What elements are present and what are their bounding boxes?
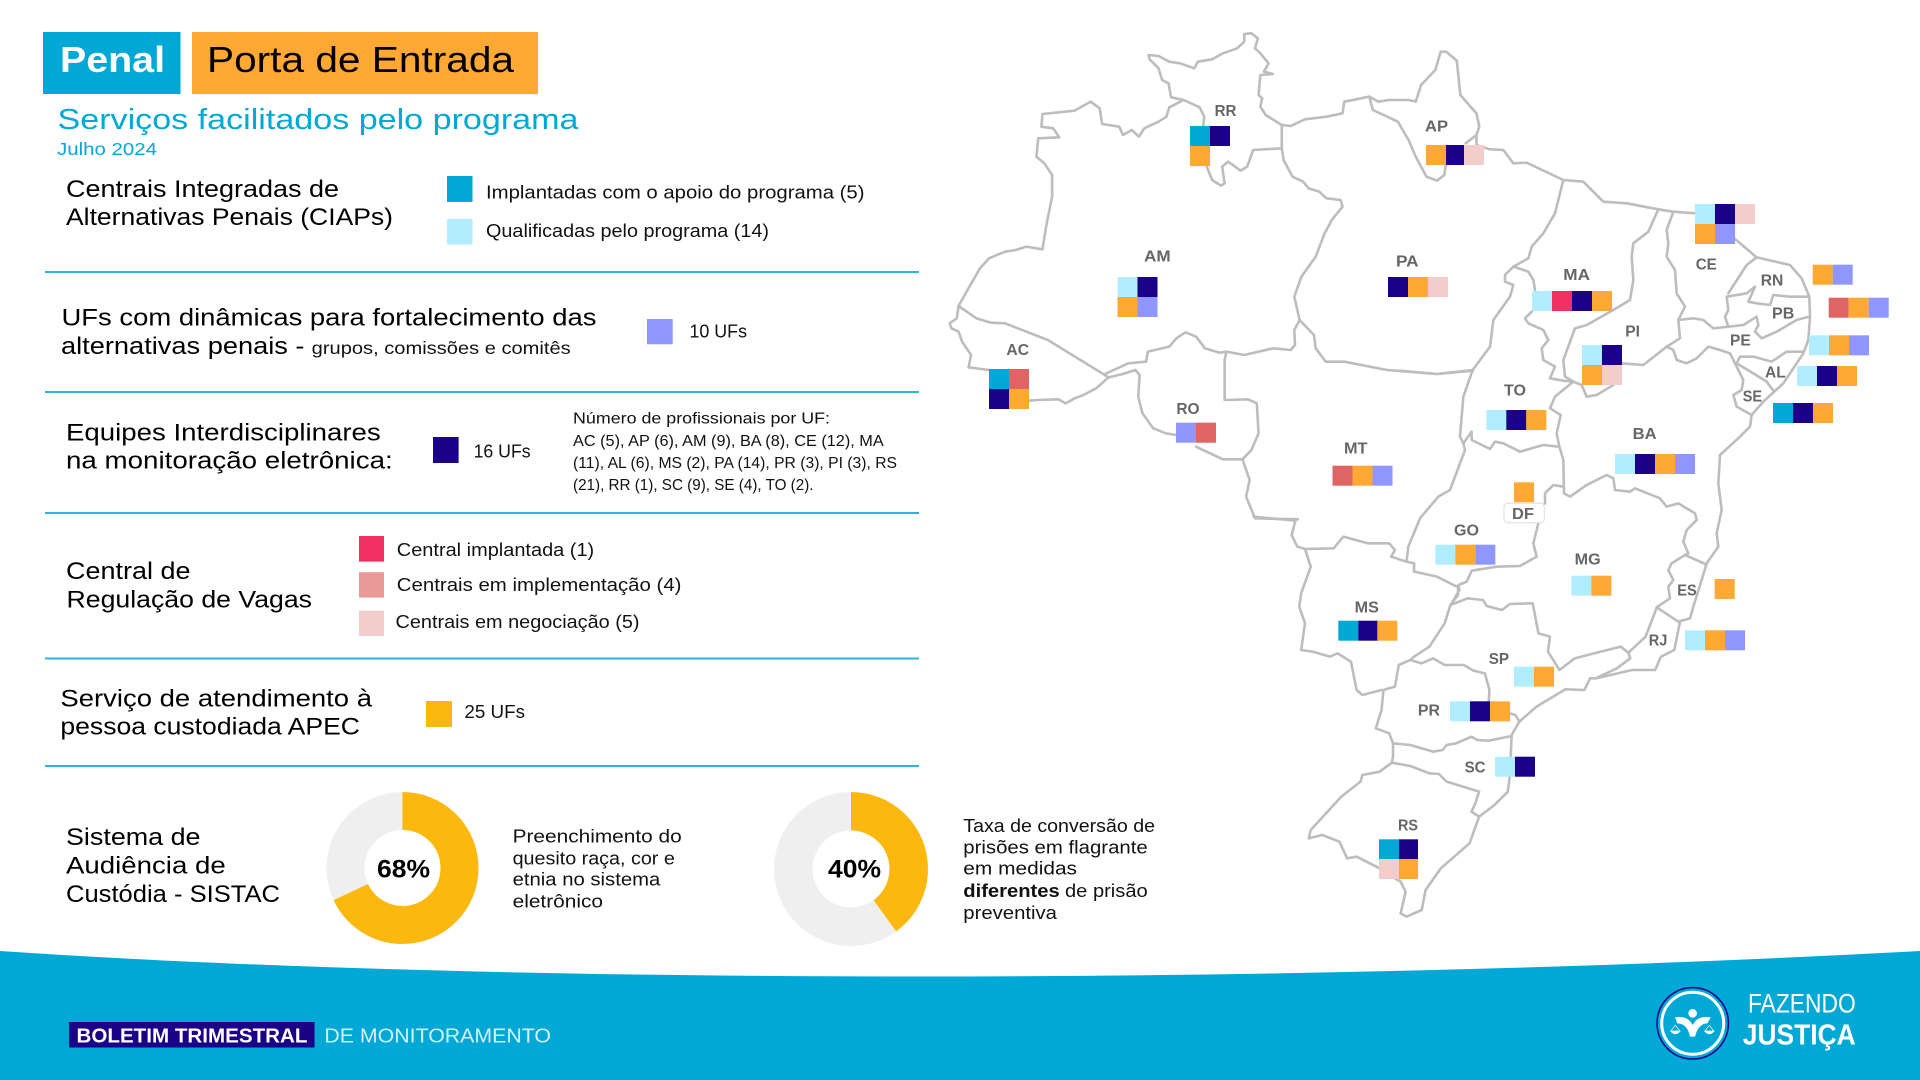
state: SP: SP	[1489, 651, 1509, 668]
state: RS: RS	[1398, 818, 1418, 835]
date: Julho 2024	[57, 139, 157, 159]
state: GO: GO	[1454, 523, 1479, 540]
heading: CIAPs: Centrais Integradas de	[66, 176, 339, 203]
heading: CIAPs	[66, 176, 393, 231]
heading: dinâmicas: UFs com dinâmicas para fortalecimento das	[62, 305, 596, 332]
state: RN: RN	[1761, 273, 1783, 290]
state: RS	[1379, 818, 1418, 879]
panel: APEC	[60, 685, 525, 741]
panel: CIAPs	[66, 176, 864, 244]
state: AP: AP	[1425, 119, 1448, 136]
state: ES	[1677, 579, 1735, 599]
text: profissionais por UF: (21), RR (1), SC (9), SE (4), TO (2).	[573, 477, 814, 494]
legend: 16 UFs: 16 UFs	[474, 442, 531, 462]
state: AM	[1118, 249, 1171, 317]
logo: Fazendo Justiça: JUSTIÇA	[1743, 1019, 1856, 1051]
state: TO	[1486, 383, 1546, 430]
state: PA	[1388, 254, 1448, 297]
footer label: BOLETIM TRIMESTRAL	[76, 1026, 308, 1048]
state: ES: ES	[1677, 582, 1697, 599]
heading: dinâmicas	[61, 305, 596, 360]
footer label	[69, 1022, 551, 1048]
map of Brazil	[950, 33, 1889, 917]
tag: Penal	[43, 32, 180, 94]
state: AC	[989, 342, 1029, 409]
heading: dinâmicas: alternativas penais -	[61, 333, 304, 360]
text: profissionais por UF: (11), AL (6), MS (2), PA (14), PR (3), PI (3), RS	[573, 455, 897, 472]
footer label: DE MONITORAMENTO	[324, 1026, 551, 1048]
state: MS: MS	[1355, 599, 1379, 616]
heading: regulação: Regulação de Vagas	[66, 586, 312, 614]
state: AC: AC	[1006, 342, 1029, 359]
state: CE: CE	[1696, 256, 1717, 273]
text: taxa de conversão	[963, 816, 1155, 923]
donut chart: 40%	[793, 811, 909, 927]
heading: SISTAC: Audiência de	[66, 853, 226, 880]
legend: em negociação	[359, 611, 640, 636]
state: AP	[1425, 119, 1484, 165]
state: MG	[1571, 551, 1611, 596]
legend: 16 UFs	[433, 437, 531, 463]
state: MA	[1532, 267, 1612, 311]
legend: central implantada: Central implantada (1)	[397, 540, 594, 560]
state: TO: TO	[1504, 383, 1526, 400]
state: MG: MG	[1575, 551, 1601, 568]
text: taxa de conversão: de prisão	[1065, 881, 1148, 901]
heading: equipes: na monitoração eletrônica:	[66, 448, 393, 475]
state: RO: RO	[1176, 401, 1200, 418]
tag: Penal: Penal	[60, 39, 165, 80]
text: taxa de conversão: em medidas	[963, 859, 1077, 879]
heading: APEC: Serviço de atendimento à	[60, 685, 372, 712]
tag: Porta de Entrada: Porta de Entrada	[207, 39, 515, 80]
legend: em negociação: Centrais em negociação (5)	[396, 612, 640, 632]
heading: APEC: pessoa custodiada APEC	[60, 714, 360, 741]
state: DF: DF	[1512, 506, 1534, 523]
donut chart: 40%: 40%	[828, 856, 881, 884]
state: RO	[1176, 401, 1216, 443]
map outlines	[950, 33, 1810, 917]
state: CE	[1695, 204, 1755, 273]
heading: SISTAC: Sistema de	[66, 824, 200, 851]
donut chart: 68%	[346, 811, 460, 925]
legend: 25 UFs: 25 UFs	[464, 702, 525, 722]
legend: 10 UFs: 10 UFs	[690, 322, 747, 342]
state: GO	[1435, 523, 1495, 565]
legend: central implantada	[359, 536, 594, 562]
state: AM: AM	[1144, 249, 1171, 266]
state: PB	[1772, 298, 1889, 322]
legend: implantadas	[447, 176, 864, 203]
state: RN	[1761, 265, 1853, 290]
text: preenchimento: quesito raça, cor e	[513, 848, 675, 868]
state: DF	[1504, 482, 1544, 523]
panel: UFs com dinâmicas	[61, 305, 747, 360]
state: MS	[1338, 599, 1397, 641]
state: RJ	[1649, 630, 1745, 650]
heading: equipes: Equipes Interdisciplinares	[66, 420, 381, 447]
title: Serviços facilitados pelo programa	[58, 104, 580, 136]
heading: APEC	[60, 685, 372, 741]
text: profissionais por UF	[573, 410, 897, 494]
text: preenchimento: Preenchimento do	[513, 827, 682, 847]
text: taxa de conversão: Taxa de conversão de	[963, 816, 1155, 836]
state: PI: PI	[1625, 324, 1640, 341]
heading: CIAPs: Alternativas Penais (CIAPs)	[66, 204, 393, 231]
text: profissionais por UF: AC (5), AP (6), AM (9), BA (8), CE (12), MA	[573, 433, 884, 450]
state: MT: MT	[1344, 440, 1368, 457]
logo: Fazendo Justiça: FAZENDO	[1748, 988, 1856, 1018]
state: SE	[1743, 389, 1833, 423]
state: RR	[1190, 103, 1237, 166]
heading: SISTAC	[66, 824, 280, 908]
state: BA	[1615, 426, 1695, 474]
heading: equipes	[66, 420, 393, 475]
state: PA: PA	[1396, 254, 1419, 271]
state: PI	[1582, 324, 1640, 385]
legend: implantadas: Implantadas com o apoio do programa (5)	[486, 183, 864, 203]
text: taxa de conversão: diferentes	[963, 881, 1060, 901]
state: PR	[1418, 701, 1510, 721]
donut chart: 68%: 68%	[377, 856, 430, 884]
tag: Porta de Entrada	[192, 32, 538, 94]
text: preenchimento: etnia no sistema	[513, 870, 661, 890]
state: RJ: RJ	[1649, 633, 1667, 650]
text: preenchimento	[513, 827, 682, 912]
heading: dinâmicas: grupos, comissões e comitês	[312, 338, 571, 358]
state: PE	[1730, 333, 1869, 355]
legend: qualificadas	[447, 219, 769, 244]
state: MA: MA	[1563, 267, 1590, 284]
legend: em implementação	[359, 572, 682, 598]
state: PE: PE	[1730, 333, 1751, 350]
legend: qualificadas: Qualificadas pelo programa (14)	[486, 221, 769, 241]
footer band	[0, 951, 1920, 1080]
state: AL	[1765, 364, 1857, 386]
legend: em implementação: Centrais em implementação (4)	[397, 575, 682, 595]
heading: regulação	[66, 558, 312, 614]
text: taxa de conversão: preventiva	[963, 903, 1058, 923]
text: taxa de conversão: prisões em flagrante	[963, 838, 1148, 858]
state: SE: SE	[1743, 389, 1762, 406]
panel: Equipes Interdisciplinares	[66, 410, 897, 494]
heading: regulação: Central de	[66, 558, 190, 585]
state: AL: AL	[1765, 364, 1786, 381]
panel: SISTAC	[66, 811, 1155, 927]
header tags	[43, 32, 538, 94]
text: profissionais por UF: Número de profissionais por UF:	[573, 410, 830, 427]
state: PB: PB	[1772, 305, 1794, 322]
state: BA: BA	[1633, 426, 1657, 443]
state: MT	[1332, 440, 1392, 486]
legend: 25 UFs	[426, 701, 525, 727]
text: preenchimento: eletrônico	[513, 892, 603, 912]
state: PR: PR	[1418, 702, 1440, 719]
state: SP	[1489, 651, 1554, 687]
state: SC: SC	[1465, 759, 1486, 776]
logo: Fazendo Justiça	[1657, 988, 1856, 1059]
panel: Central de Regulação de Vagas	[66, 536, 682, 636]
state: SC	[1465, 757, 1535, 777]
state: RR: RR	[1215, 103, 1237, 120]
legend: 10 UFs	[647, 319, 747, 344]
heading: SISTAC: Custódia - SISTAC	[66, 881, 280, 908]
